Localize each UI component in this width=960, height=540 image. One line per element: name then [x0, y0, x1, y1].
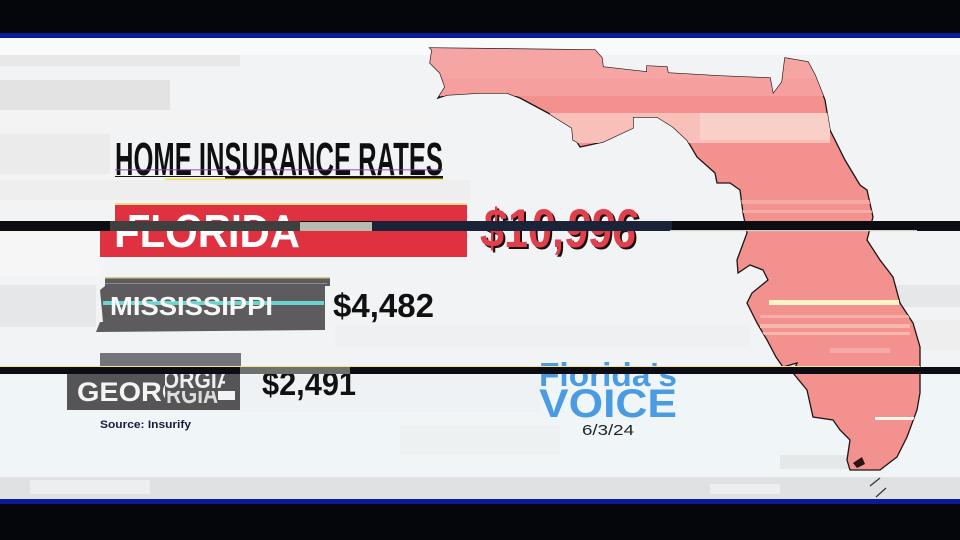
logo: Florida's Voice: Florida's	[539, 356, 677, 393]
Florida bar: FLORIDA	[114, 208, 300, 257]
map of Florida	[430, 48, 930, 497]
Florida price: $10,996	[480, 202, 636, 258]
title: HOME INSURANCE RATES	[115, 133, 443, 185]
Georgia bar: GEORGIA	[120, 379, 218, 409]
Mississippi bar: MISSISSIPPI	[110, 291, 273, 321]
Florida price: $10,996	[484, 199, 640, 255]
glitch bar: upper	[0, 221, 960, 231]
Georgia bar	[67, 353, 241, 410]
Mississippi price: $4,482	[333, 287, 434, 324]
logo: Florida's Voice	[539, 356, 677, 426]
glitch bar: lower	[0, 366, 960, 374]
source: Source: Insurify	[100, 419, 192, 431]
Mississippi bar	[96, 277, 330, 332]
logo: Florida's Voice: VOICE	[539, 382, 677, 426]
Georgia bar: GEORGIA	[77, 377, 213, 407]
Florida bar: FLORIDA	[127, 206, 297, 255]
Florida price: $10,996	[482, 204, 638, 260]
Georgia bar: GEORGIA	[132, 367, 232, 394]
Florida bar	[100, 203, 467, 257]
date: 6/3/24	[582, 422, 634, 439]
Georgia price: $2,491	[262, 365, 356, 402]
Florida price: $10,996	[486, 201, 642, 257]
